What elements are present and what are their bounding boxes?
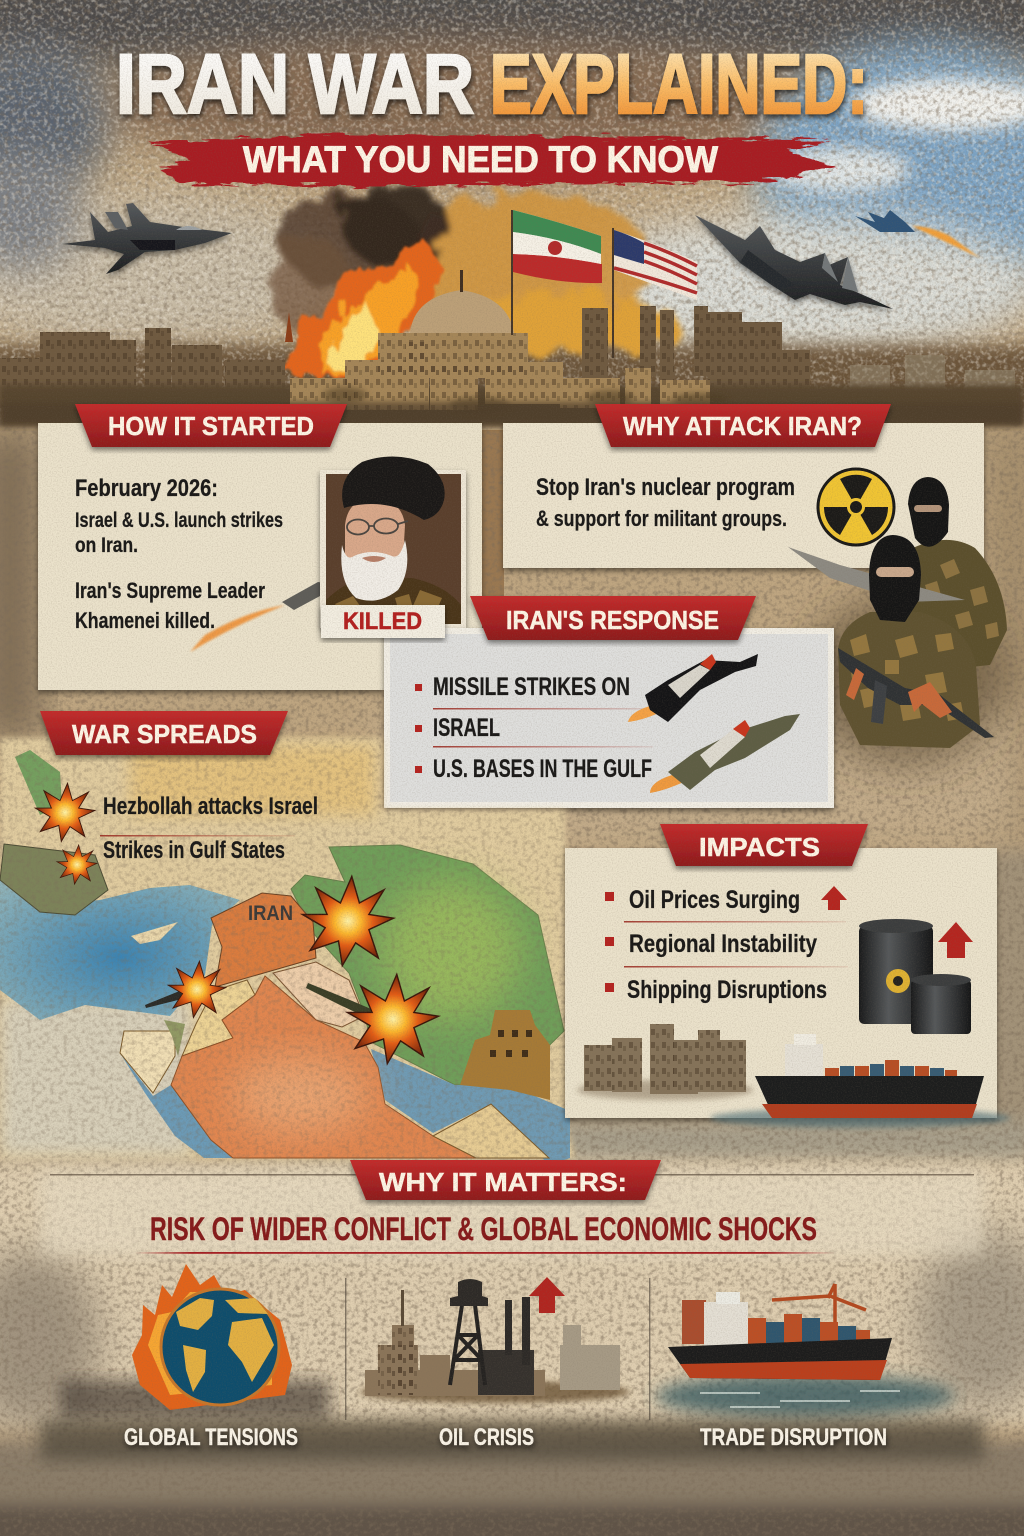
label: Iran: IRAN (248, 902, 293, 925)
land: Syria Iraq orange labelled Iran (211, 893, 316, 987)
land: north-west green (15, 750, 62, 815)
land: Jordan tan (182, 980, 255, 1056)
icon: green missile (650, 714, 800, 793)
missile: lower right (306, 983, 378, 1020)
icon: flag of United States (612, 228, 697, 358)
text: how it started body: Iran's Supreme Leader (75, 578, 265, 603)
map: war spreads (0, 734, 577, 1164)
explosion: Gulf States (57, 845, 97, 884)
land: Turkey olive (0, 844, 108, 915)
divider: left (345, 1278, 346, 1420)
list: impacts items: Shipping Disruptions (627, 976, 827, 1004)
icon: red arrow oil prices (821, 886, 847, 910)
icon: black missile (628, 654, 758, 722)
portrait: Khamenei (320, 456, 466, 628)
text: why attack body (536, 474, 795, 531)
rifle (838, 648, 994, 738)
subtitle brush banner (148, 134, 838, 186)
title (116, 37, 868, 131)
banner: impacts: IMPACTS (699, 832, 820, 862)
icon: oil barrels (859, 919, 971, 1034)
list: response items (415, 673, 653, 783)
banner: impacts (660, 824, 868, 866)
land: Iraq pale (273, 962, 364, 1027)
list: response items: ISRAEL (433, 714, 500, 742)
explosion: Hezbollah (35, 783, 95, 842)
text: how it started body (75, 475, 283, 633)
robe (326, 578, 461, 624)
front soldier (838, 535, 980, 748)
banner: Iran's response: IRAN'S RESPONSE (506, 605, 719, 635)
icon: container ship (655, 1284, 955, 1418)
beard (341, 540, 407, 601)
turban (342, 456, 445, 520)
list: impacts items: Oil Prices Surging (629, 886, 800, 914)
band: why it matters (40, 1160, 984, 1256)
list: impacts items: Regional Instability (629, 930, 817, 958)
labels: bottom categories (40, 1420, 984, 1460)
icon: burning globe (60, 1264, 330, 1420)
title: IRAN WAR (116, 37, 474, 131)
panel: impacts (565, 848, 1010, 1128)
banner: how it started (75, 404, 347, 447)
sea: Red Sea (120, 1053, 233, 1158)
panel: how it started (38, 423, 482, 690)
subtitle brush banner: WHAT YOU NEED TO KNOW (243, 139, 718, 180)
text: how it started body: February 2026: (75, 475, 218, 502)
legend: war spreads items: Hezbollah attacks Israel (103, 793, 318, 820)
land: Cyprus (131, 922, 178, 944)
explosion: Gulf (347, 974, 439, 1064)
icon: small jet with flame (855, 210, 980, 258)
face (345, 498, 405, 588)
icon: flag of Iran (511, 210, 602, 335)
banner: why attack Iran: WHY ATTACK IRAN? (623, 411, 862, 441)
icon: radiation symbol (818, 469, 894, 545)
list: response items: U.S. BASES IN THE GULF (433, 755, 652, 783)
sea: Persian Gulf and Arabian Sea (371, 1049, 570, 1165)
icon: red arrow barrels (938, 922, 973, 958)
map ruined city (460, 1010, 550, 1100)
text: why attack body: & support for militant groups. (536, 506, 787, 531)
divider: right (649, 1278, 650, 1420)
banner: war spreads (40, 711, 288, 755)
banner: Iran's response (470, 596, 756, 640)
map texture (0, 738, 574, 1158)
water (710, 1108, 1010, 1128)
text: how it started body: Israel & U.S. launch strikes (75, 509, 283, 532)
land: Saudi Arabia orange (171, 976, 476, 1158)
land: Sinai (120, 1031, 175, 1093)
label: KILLED: KILLED (343, 608, 422, 635)
glasses (347, 518, 408, 534)
text: why attack body: Stop Iran's nuclear program (536, 474, 795, 501)
explosion: Israel (168, 961, 226, 1018)
list: impacts items (605, 886, 848, 1004)
title: EXPLAINED: (490, 37, 868, 131)
banner: why it matters: WHY IT MATTERS: (379, 1167, 627, 1197)
text: how it started body: Khamenei killed. (75, 608, 215, 633)
explosion fire and smoke (270, 185, 680, 380)
label: KILLED (321, 605, 445, 638)
back soldier (900, 477, 1007, 670)
list: response items: MISSILE STRIKES ON (433, 673, 630, 701)
panel: Iran's response (384, 628, 834, 808)
text: how it started body: on Iran. (75, 534, 138, 557)
banner: war spreads: WAR SPREADS (72, 719, 257, 749)
legend: war spreads items: Strikes in Gulf States (103, 837, 285, 864)
panel: why attack Iran (503, 423, 984, 568)
icon: cargo ship (755, 1034, 984, 1118)
sea: Mediterranean (0, 880, 240, 1020)
labels: bottom categories: GLOBAL TENSIONS (124, 1424, 298, 1451)
soldiers: militant group (788, 477, 1007, 765)
icon: fighter jet left (62, 203, 232, 274)
missile: lower left (145, 990, 186, 1008)
explosion: Iran large (302, 876, 394, 966)
land: Israel (164, 1020, 185, 1056)
land: Iran green (291, 845, 564, 1085)
shoulder missile (788, 547, 965, 602)
icon: fighter jet right (695, 215, 893, 309)
banner: how it started: HOW IT STARTED (108, 411, 314, 441)
land: Oman tan (433, 1104, 549, 1158)
city skyline (0, 270, 1024, 426)
icon: small missile with flame (190, 582, 334, 652)
banner: why attack Iran (595, 404, 891, 447)
banner: why it matters (350, 1160, 661, 1200)
labels: bottom categories: TRADE DISRUPTION (700, 1424, 887, 1451)
labels: bottom categories: OIL CRISIS (439, 1424, 534, 1451)
icon: oil crisis skyline (360, 1277, 630, 1403)
icon: ruined city (577, 1024, 753, 1100)
legend: war spreads items (100, 793, 318, 864)
